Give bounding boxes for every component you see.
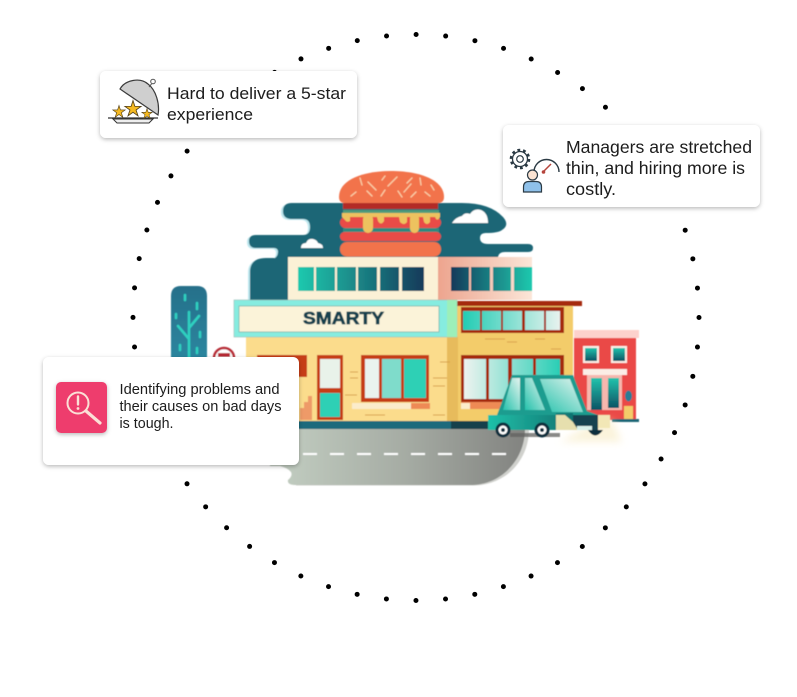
right annex building [447, 301, 582, 421]
sign: SMARTY [234, 300, 457, 337]
upper floor [288, 257, 532, 300]
icon: magnifier alert [56, 382, 107, 433]
sign: SMARTY: SMARTY [303, 308, 384, 328]
main building ground floor [246, 337, 458, 421]
dotted circle [133, 34, 699, 600]
car [488, 375, 622, 442]
text: 5-star experience: experience [167, 105, 253, 124]
text: managers stretched thin: Managers are stretched [566, 137, 752, 157]
text: managers stretched thin: costly. [566, 179, 616, 199]
card: identifying problems [43, 357, 299, 465]
text: managers stretched thin: thin, and hiring more is [566, 158, 745, 178]
no-entry road sign [214, 348, 234, 368]
icon: gear, gauge and manager [511, 150, 559, 192]
sky cloud backdrop [247, 203, 533, 301]
road and pavement [270, 421, 529, 486]
burger [339, 171, 444, 256]
text: identifying problems: Identifying problems and [120, 381, 280, 398]
card: managers stretched thin [503, 125, 760, 207]
text: 5-star experience: Hard to deliver a 5-star [167, 84, 346, 103]
tree [171, 286, 207, 362]
illustration: restaurant building with burger [171, 171, 639, 486]
red neighbouring building [574, 330, 639, 422]
icon: cloche with stars [108, 79, 159, 123]
text: identifying problems: is tough. [120, 415, 174, 432]
text: identifying problems: their causes on bad days [120, 398, 282, 415]
card: 5-star experience [100, 71, 357, 138]
